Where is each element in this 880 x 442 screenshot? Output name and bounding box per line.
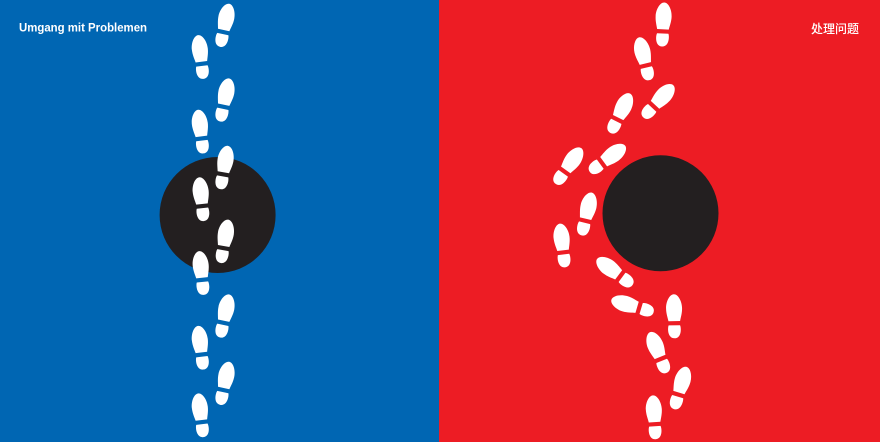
- panel: blue, Umgang mit Problemen: [0, 0, 439, 442]
- black hole obstacle: [160, 157, 276, 273]
- panel: red, 处理问题: [439, 0, 880, 442]
- footprints walking straight through the hole: [190, 2, 237, 438]
- black hole obstacle: [602, 155, 718, 271]
- heading: Umgang mit Problemen: Umgang mit Problemen: [19, 20, 147, 34]
- red background: [439, 0, 880, 442]
- blue background: [0, 0, 439, 442]
- heading: 处理问题: 处理问题: [811, 21, 859, 36]
- footprints walking around the hole: [549, 2, 694, 440]
